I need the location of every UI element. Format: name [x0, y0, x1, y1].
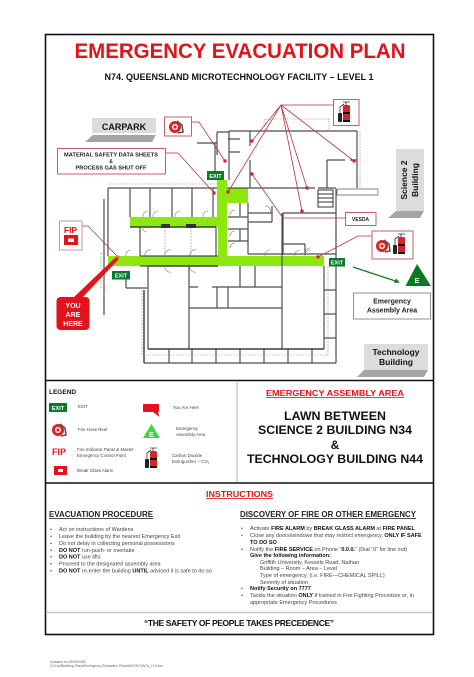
- footer note: [50, 660, 163, 668]
- evacuation procedure: Do not delay in collecting personal possessions: [59, 541, 175, 547]
- emergency assembly area label: [354, 293, 430, 319]
- discovery of fire: Building – Room – Area – Level: [260, 566, 337, 572]
- evacuation procedure: EVACUATION PROCEDURE: [49, 510, 154, 519]
- evacuation procedure: •: [50, 568, 52, 574]
- discovery of fire: Activate FIRE ALARM by BREAK GLASS ALARM at FIRE PANEL: [250, 526, 415, 532]
- exit sign: left: [112, 271, 130, 280]
- evacuation procedure: •: [50, 554, 52, 560]
- you are here marker: HERE: [63, 321, 83, 328]
- emergency assembly area panel: EMERGENCY ASSEMBLY AREA: [266, 389, 404, 398]
- callout: material safety data sheets: MATERIAL SAFETY DATA SHEETS: [64, 152, 159, 158]
- callout: VESDA: [250, 172, 376, 226]
- callout: material safety data sheets: &: [109, 159, 113, 165]
- legend: FIP: FIP: [52, 447, 66, 457]
- arrow to assembly area: [353, 267, 400, 283]
- legend: break glass: Break Glass Alarm: [77, 468, 114, 473]
- callout: FIP: FIP: [64, 225, 77, 235]
- exit sign: top: EXIT: [209, 174, 222, 180]
- science 2 building label: Building: [410, 163, 420, 197]
- dashed outlines: [101, 119, 360, 355]
- section dividers: [45, 380, 433, 483]
- stairs: [318, 190, 333, 207]
- discovery of fire: Griffith University, Kessels Road, Nathan: [260, 560, 359, 566]
- green evacuation corridors: [108, 180, 324, 266]
- legend: break glass: [54, 466, 114, 475]
- emergency assembly area panel: SCIENCE 2 BUILDING N34: [258, 423, 412, 437]
- evacuation procedure: DO NOT re-enter the building UNTIL advised it is safe to do so: [59, 568, 212, 574]
- walls: [104, 188, 336, 363]
- exit sign: right: [329, 258, 345, 266]
- science 2 building label: [388, 149, 424, 218]
- footer note: Updated on 25/05/2006: [50, 660, 86, 664]
- emergency assembly area panel: [247, 389, 423, 466]
- discovery of fire: •: [241, 593, 243, 599]
- evacuation procedure: Leave the building by the nearest Emergency Exit: [59, 534, 181, 540]
- emergency assembly area panel: TECHNOLOGY BUILDING N44: [247, 452, 423, 466]
- evacuation procedure: [49, 510, 212, 574]
- evacuation procedure: Proceed to the designated assembly area: [59, 562, 161, 568]
- title: EMERGENCY EVACUATION PLAN: [74, 40, 406, 63]
- discovery of fire: [240, 510, 422, 606]
- callout: VESDA: VESDA: [352, 217, 369, 223]
- discovery of fire: •: [241, 547, 243, 553]
- legend: hose reel: Fire Hose Reel: [78, 427, 107, 432]
- instructions heading: INSTRUCTIONS: [206, 490, 274, 499]
- legend: extinguisher: Extinguisher – CO₂: [172, 459, 210, 464]
- callout: material safety data sheets: PROCESS GAS SHUT OFF: [76, 166, 146, 172]
- legend: exit: EXIT: [78, 404, 88, 409]
- assembly area triangle: E: [414, 276, 420, 285]
- evacuation procedure: DO NOT use lifts: [59, 554, 101, 560]
- carpark label: CARPARK: [102, 122, 147, 132]
- evacuation procedure: •: [50, 541, 52, 547]
- emergency assembly area label: Emergency: [373, 298, 411, 306]
- legend: LEGEND: [49, 389, 76, 396]
- evacuation procedure: DO NOT run-push- or overtake: [59, 548, 134, 554]
- safety quote: “THE SAFETY OF PEOPLE TAKES PRECEDENCE”: [144, 618, 334, 628]
- you are here marker: YOU: [65, 303, 81, 310]
- legend: extinguisher: [145, 448, 210, 468]
- you are here marker: [56, 255, 120, 330]
- legend: FIP: [52, 447, 134, 458]
- legend: assembly area: Assembly Area: [176, 432, 206, 437]
- legend: you are here: You Are Here: [173, 405, 200, 410]
- technology building label: Technology: [372, 347, 420, 357]
- discovery of fire: appropriate Emergency Procedures: [250, 600, 337, 606]
- discovery of fire: DISCOVERY OF FIRE OR OTHER EMERGENCY: [240, 510, 417, 519]
- discovery of fire: •: [241, 526, 243, 532]
- page frame: [46, 34, 434, 634]
- evacuation procedure: •: [50, 548, 52, 554]
- emergency assembly area label: Assembly Area: [367, 308, 417, 314]
- floor plan: [101, 119, 378, 363]
- discovery of fire: Close any doors/windows that may restrict emergency, ONLY IF SAFE: [250, 533, 422, 539]
- legend: [49, 389, 210, 475]
- evacuation procedure: •: [50, 562, 52, 568]
- exit sign: right: EXIT: [331, 260, 344, 266]
- discovery of fire: Severity of situation: [260, 580, 308, 586]
- callout: fire hose reel: [164, 117, 227, 163]
- discovery of fire: Notify Security on 7777: [250, 586, 311, 592]
- callout: extinguishers: [226, 100, 359, 213]
- discovery of fire: Tackle the situation ONLY if trained in Fire Fighting Procedure or, in: [250, 593, 414, 599]
- discovery of fire: Type of emergency, (i.e. FIRE—CHEMICAL SPILL): [260, 573, 385, 579]
- legend: exit: [49, 403, 88, 412]
- discovery of fire: Notify the FIRE SERVICE on Phone “0.0.0.” (Dial “0” for line out): [250, 547, 407, 553]
- legend: hose reel: [52, 424, 107, 436]
- legend: FIP: Emergency Control Point: [77, 453, 127, 458]
- callout: FIP: [60, 221, 118, 257]
- discovery of fire: TO DO SO: [250, 540, 278, 546]
- callout: material safety data sheets: [58, 148, 216, 195]
- discovery of fire: •: [241, 533, 243, 539]
- carpark label: [85, 118, 156, 142]
- emergency assembly area panel: LAWN BETWEEN: [284, 409, 386, 423]
- evacuation procedure: Act on instructions of Wardens: [59, 527, 134, 533]
- legend: you are here: [143, 404, 200, 417]
- discovery of fire: •: [241, 586, 243, 592]
- assembly area triangle: [406, 264, 431, 286]
- you are here marker: ARE: [66, 312, 81, 319]
- legend: FIP: Fire Indicator Panel & Master: [77, 447, 134, 452]
- discovery of fire: Give the following information:: [250, 553, 331, 559]
- legend: exit: EXIT: [52, 406, 65, 412]
- technology building label: [357, 344, 428, 377]
- doors: [126, 206, 310, 272]
- legend: assembly area: [143, 424, 206, 439]
- footer note: G:\Cad\Building Plans\Emergency Evaluation Plans\N47\N74\N74_L14.doc: [50, 664, 163, 668]
- technology building label: Building: [379, 357, 413, 367]
- emergency assembly area panel: &: [331, 438, 340, 452]
- evacuation procedure: •: [50, 527, 52, 533]
- evacuation procedure: •: [50, 534, 52, 540]
- legend: extinguisher: Carbon Dioxide: [172, 453, 203, 458]
- science 2 building label: Science 2: [399, 160, 409, 200]
- legend: assembly area: E: [149, 432, 154, 439]
- legend: assembly area: Emergency: [176, 426, 199, 431]
- callout: hose reel and extinguisher: [316, 231, 413, 259]
- subtitle: N74. QUEENSLAND MICROTECHNOLOGY FACILITY – LEVEL 1: [104, 72, 374, 82]
- exit sign: top: [207, 171, 224, 180]
- exit sign: left: EXIT: [115, 274, 128, 280]
